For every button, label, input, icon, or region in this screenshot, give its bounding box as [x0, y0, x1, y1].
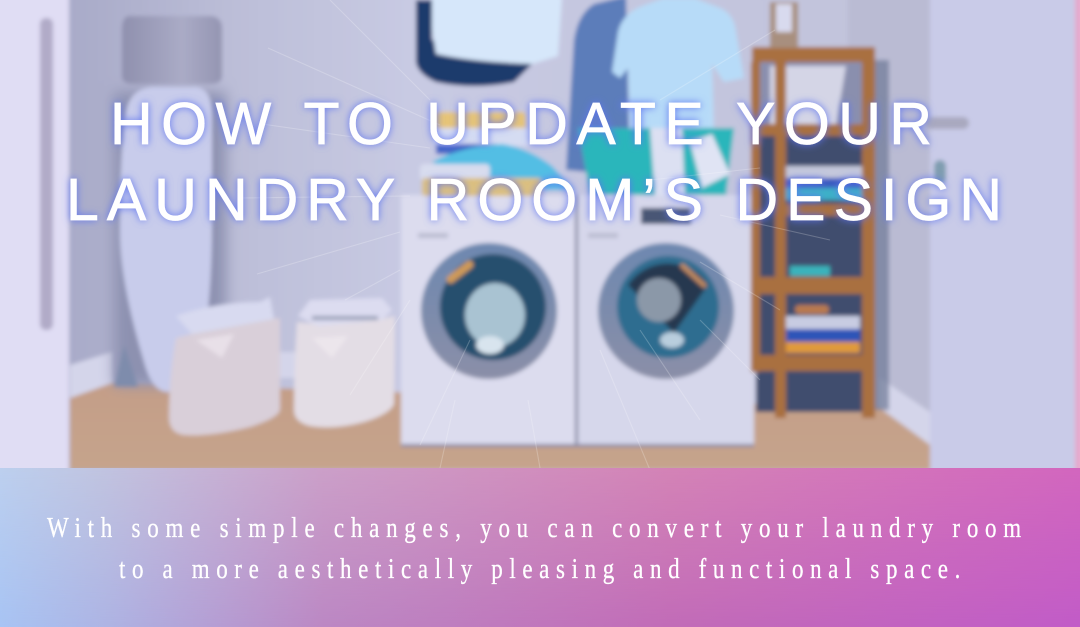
subtitle: to a more aesthetically pleasing and functional space.: [119, 553, 960, 585]
back wall: [60, 0, 940, 475]
teal laundry tub: [578, 128, 734, 196]
washing machines: [401, 195, 754, 447]
hanging clothes: [416, 0, 744, 176]
subtitle: With some simple changes, you can convert your laundry room: [47, 512, 1021, 544]
subtitle: [47, 512, 1021, 585]
right side wall: [848, 0, 932, 445]
wooden shelf: [751, 2, 889, 418]
left basket: [169, 297, 280, 435]
left drum: [421, 243, 557, 379]
skirting boards: [70, 352, 930, 445]
photo: blurred laundry room: [0, 0, 1080, 475]
control panel: [418, 208, 691, 238]
left door: [0, 0, 69, 475]
right basket: [294, 298, 395, 427]
right door with handle: [925, 0, 1080, 475]
light rays: [240, 0, 830, 470]
bottom gradient band: [0, 468, 1080, 627]
right drum: [598, 243, 734, 379]
title: HOW TO UPDATE YOUR: [110, 91, 932, 157]
title: LAUNDRY ROOM’S DESIGN: [66, 167, 1002, 233]
ironing board: [114, 16, 226, 392]
floor: [70, 383, 932, 470]
laundry stack: [420, 112, 574, 196]
title: [66, 91, 1002, 233]
